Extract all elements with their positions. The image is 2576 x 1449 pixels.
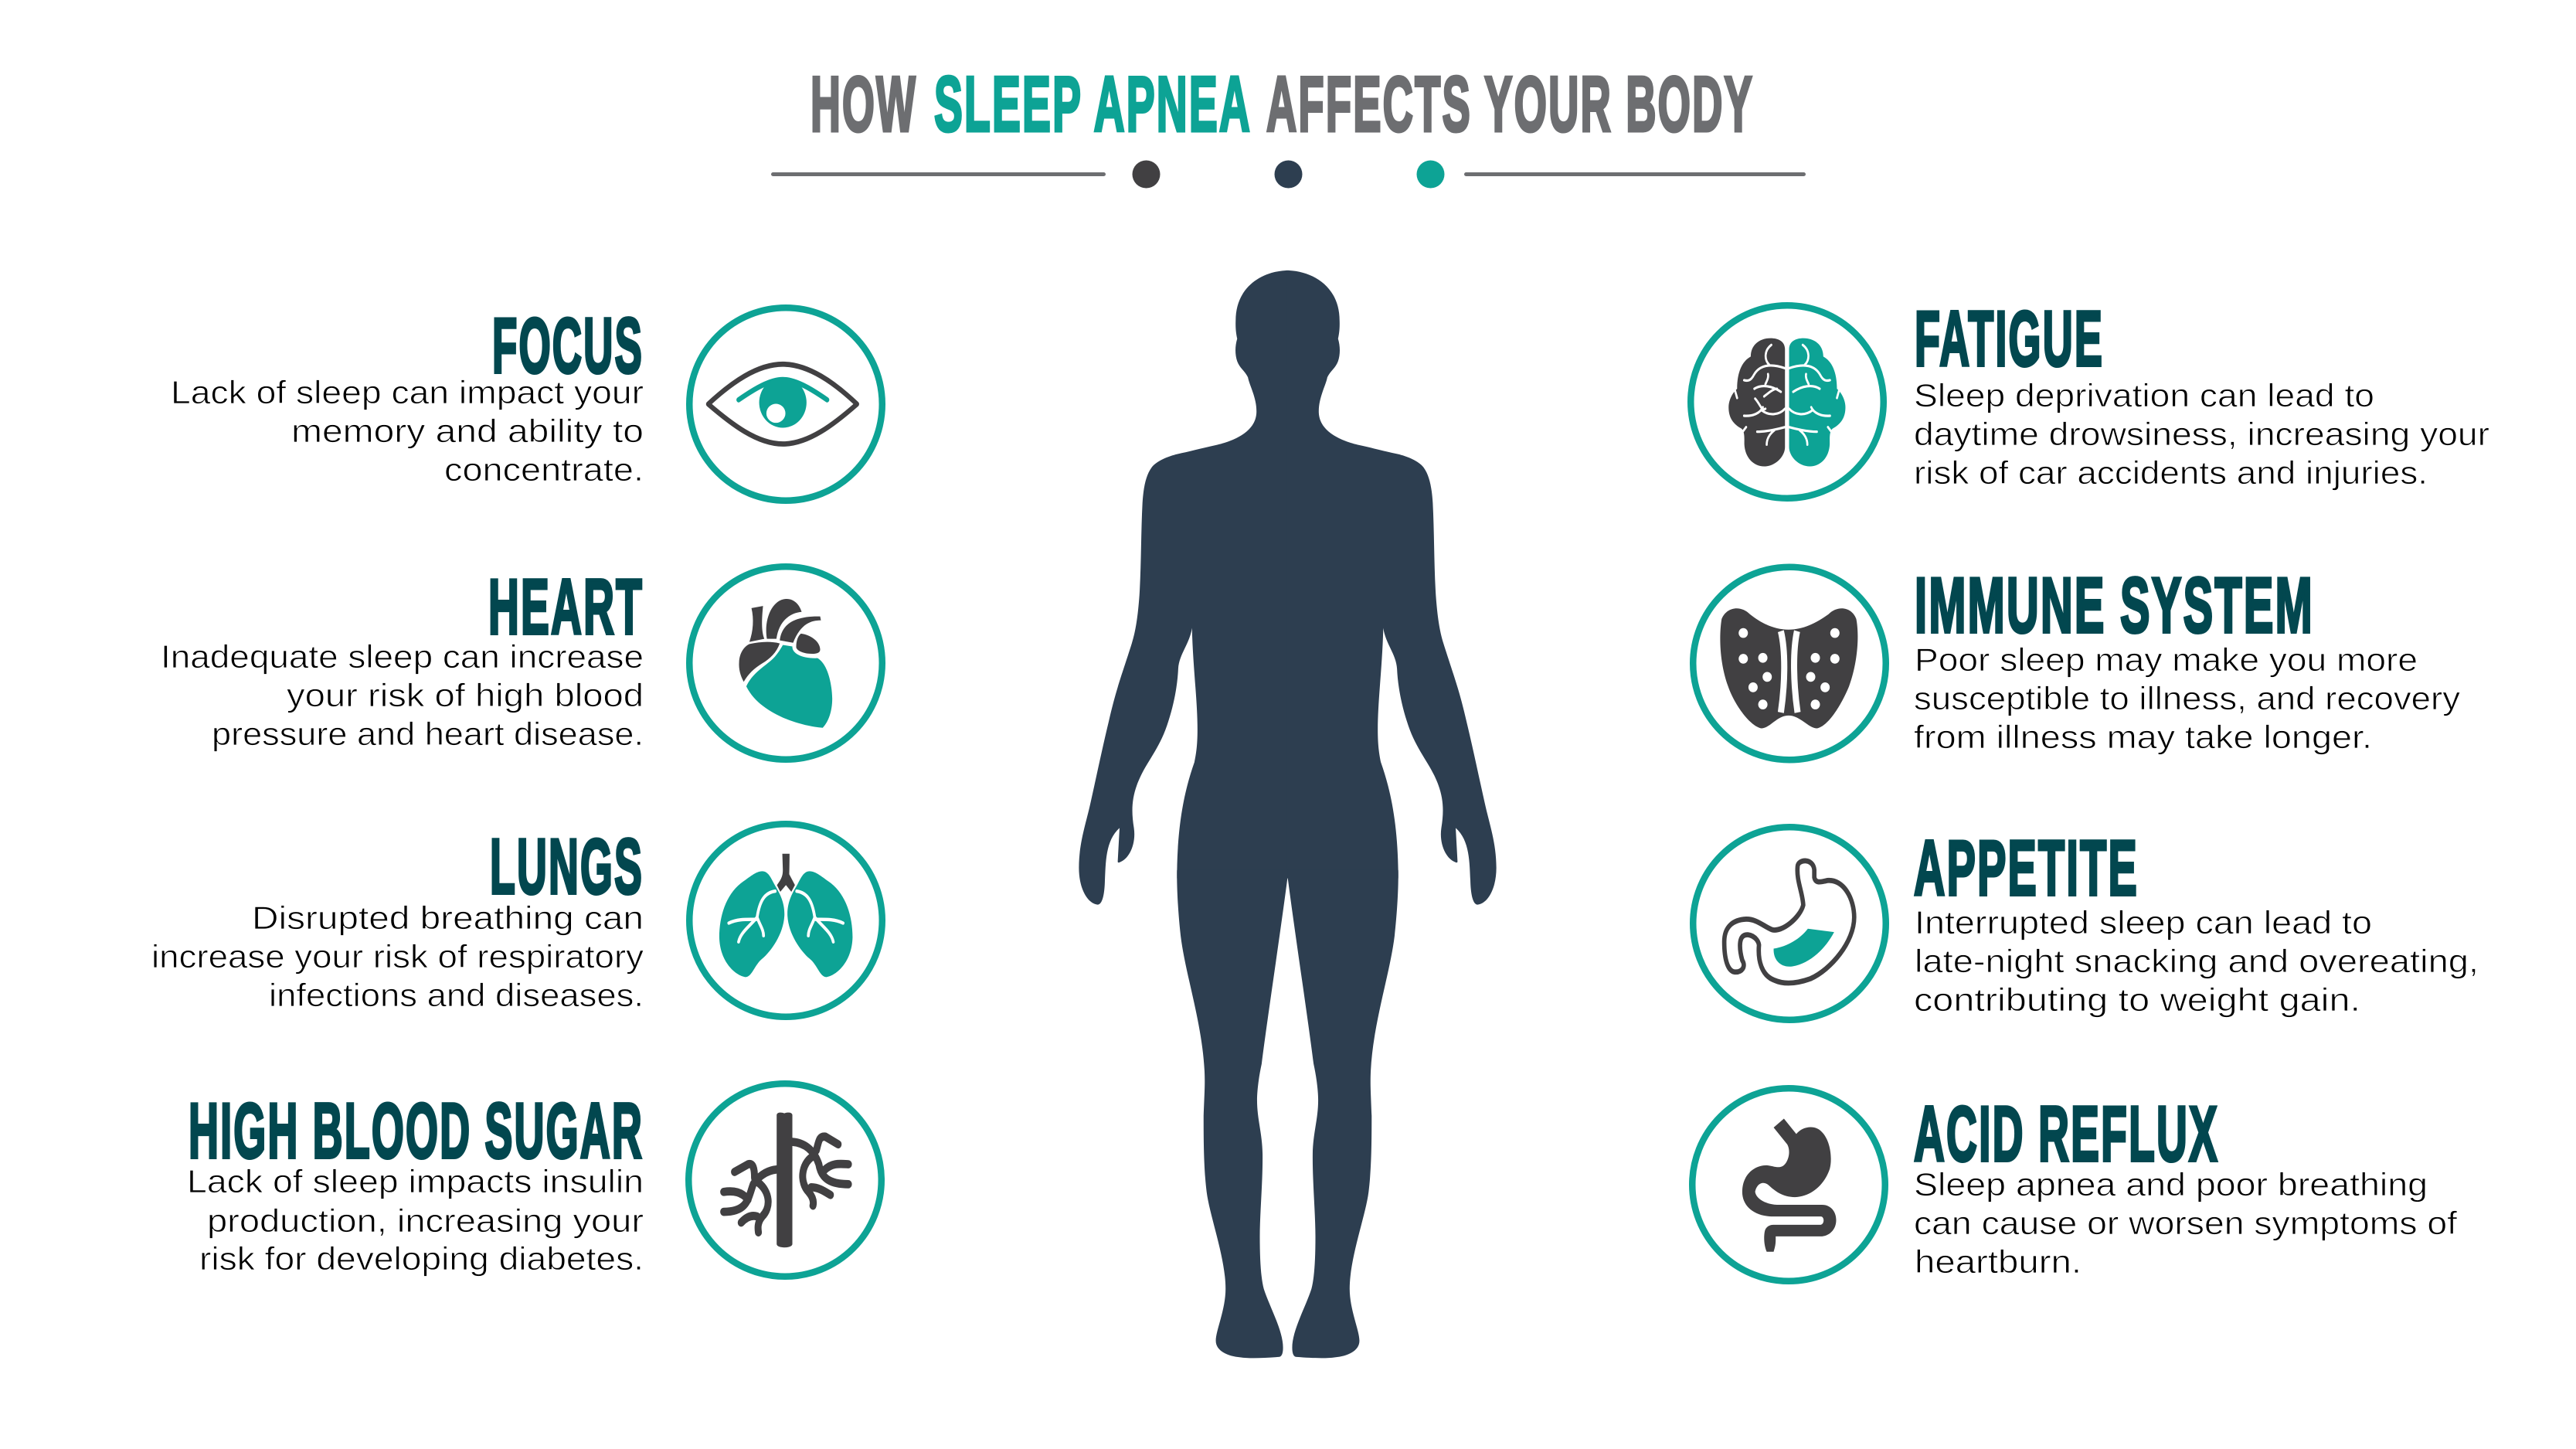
text: acid reflux description (1914, 1166, 2457, 1280)
text: fatigue description: Sleep deprivation can lead to (1914, 377, 2374, 413)
text: heart description (161, 638, 644, 752)
text: high blood sugar description: Lack of sleep impacts insulin (187, 1163, 644, 1199)
heading: appetite: APPETITE (1914, 825, 2139, 912)
icon: heart in circle (689, 566, 882, 760)
icon: stomach and intestine in circle (1692, 1088, 1885, 1281)
icon: eye in circle (689, 308, 882, 501)
text: lungs description: increase your risk of respiratory (151, 938, 644, 975)
text: fatigue description: daytime drowsiness, increasing your (1914, 416, 2489, 452)
icon: stomach outline in circle (1693, 827, 1886, 1020)
panel: acid reflux (1914, 1091, 2457, 1280)
title (811, 62, 1754, 148)
title: AFFECTS YOUR BODY (1266, 62, 1754, 148)
text: immune system description: susceptible to illness, and recovery (1914, 680, 2460, 716)
text: immune system description (1914, 641, 2460, 755)
heading: fatigue: FATIGUE (1915, 296, 2104, 383)
panel: high blood sugar (187, 1088, 644, 1277)
heading: heart: HEART (488, 564, 644, 651)
text: fatigue description: risk of car accidents and injuries. (1914, 454, 2428, 491)
text: acid reflux description: Sleep apnea and poor breathing (1914, 1166, 2428, 1202)
human body silhouette (1079, 270, 1497, 1358)
text: appetite description: late-night snacking and overeating, (1915, 943, 2479, 979)
text: focus description: Lack of sleep can impact your (171, 374, 644, 410)
panel: immune system (1914, 563, 2460, 755)
text: heart description: pressure and heart disease. (212, 716, 644, 752)
text: appetite description (1914, 904, 2479, 1018)
text: acid reflux description: heartburn. (1915, 1243, 2082, 1280)
panel: fatigue (1914, 296, 2489, 491)
title: SLEEP APNEA (934, 62, 1252, 148)
icon: brain in circle (1691, 305, 1884, 498)
icon: lungs in circle (689, 824, 882, 1017)
text: focus description (171, 374, 644, 488)
text: heart description: your risk of high blood (287, 677, 644, 713)
icon: blood vessel in circle (688, 1083, 882, 1277)
icon: thymus in circle (1693, 567, 1886, 760)
panel: focus (171, 303, 644, 488)
text: lungs description: infections and diseases. (269, 977, 644, 1013)
text: lungs description (151, 900, 644, 1013)
panel: lungs (151, 824, 644, 1013)
panel: heart (161, 564, 644, 752)
text: appetite description: Interrupted sleep can lead to (1915, 904, 2372, 940)
text: heart description: Inadequate sleep can increase (161, 638, 644, 675)
heading: acid reflux: ACID REFLUX (1914, 1091, 2219, 1178)
text: focus description: memory and ability to (291, 413, 644, 449)
text: high blood sugar description: risk for developing diabetes. (199, 1240, 644, 1277)
text: immune system description: Poor sleep may make you more (1915, 641, 2418, 678)
panel: appetite (1914, 825, 2479, 1018)
text: high blood sugar description: production, increasing your (207, 1202, 644, 1239)
title: HOW (811, 62, 917, 148)
text: high blood sugar description (187, 1163, 644, 1277)
text: fatigue description (1914, 377, 2489, 491)
text: acid reflux description: can cause or worsen symptoms of (1914, 1205, 2457, 1241)
heading: lungs: LUNGS (490, 824, 644, 910)
title divider with three dots (771, 161, 1806, 189)
text: immune system description: from illness may take longer. (1914, 719, 2372, 755)
heading: high blood sugar: HIGH BLOOD SUGAR (189, 1088, 644, 1175)
text: focus description: concentrate. (444, 451, 644, 488)
text: lungs description: Disrupted breathing can (252, 900, 644, 936)
text: appetite description: contributing to weight gain. (1914, 981, 2360, 1018)
heading: focus: FOCUS (492, 303, 644, 389)
